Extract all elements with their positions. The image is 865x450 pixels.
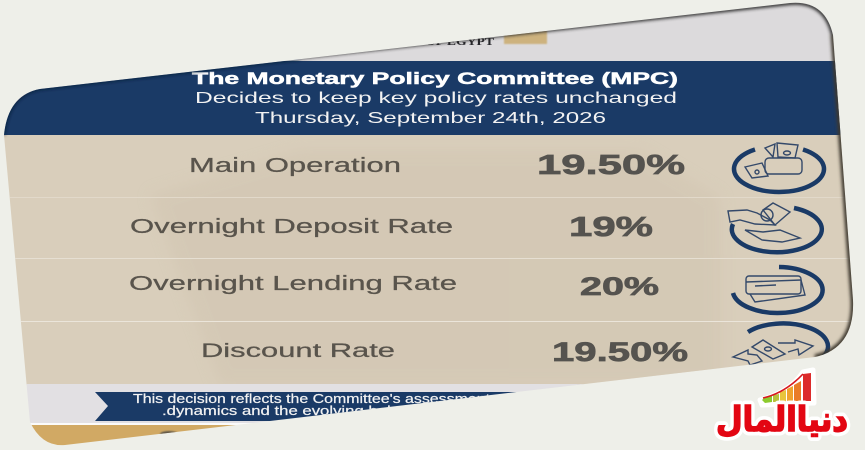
date: Thursday, September 24th, 2026 [255,110,606,127]
logo chart icon [760,370,814,405]
row: main operation: Main Operation [189,155,401,177]
footer band [30,423,251,446]
row: discount rate: Discount Rate [201,341,395,362]
title: The Monetary Policy Committee (MPC) [192,69,678,88]
logo wordmark: دنياالمال [716,400,848,440]
icon: hands exchanging money [728,203,822,252]
icon: money with arrows [733,323,828,365]
row: overnight lending rate [129,267,823,313]
icon: bank cards [733,267,823,313]
row: main operation: 19.50% [537,149,685,180]
icon: wallet and banknotes [734,143,824,192]
row: overnight deposit rate: Overnight Deposit Rate [130,216,453,238]
ribbon [95,392,516,421]
panel: decision note: .dynamics and the evolving balance [162,404,427,418]
note text: This decision reflects the Committee's assessment [133,392,491,406]
panel: rates table background [0,135,865,385]
row: main operation [189,143,824,192]
row: overnight lending rate: Overnight Lending Rate [129,273,457,295]
row: discount rate [201,323,828,367]
logo: Donia Al-Mal [716,370,848,440]
logo wordmark: دنياالمال [716,400,848,440]
row: overnight deposit rate [130,203,822,252]
row: overnight deposit rate: 19% [569,211,653,242]
panel: decision note [26,384,583,423]
row: overnight lending rate: 20% [580,273,659,301]
card edge shadows [4,3,853,357]
row: discount rate: 19.50% [552,337,688,367]
header strip: central bank name and emblem [428,31,548,45]
subtitle: Decides to keep key policy rates unchanged [195,90,677,107]
header strip: central bank name and emblem: OF EGYPT [425,36,495,48]
panel: title banner [0,61,865,135]
